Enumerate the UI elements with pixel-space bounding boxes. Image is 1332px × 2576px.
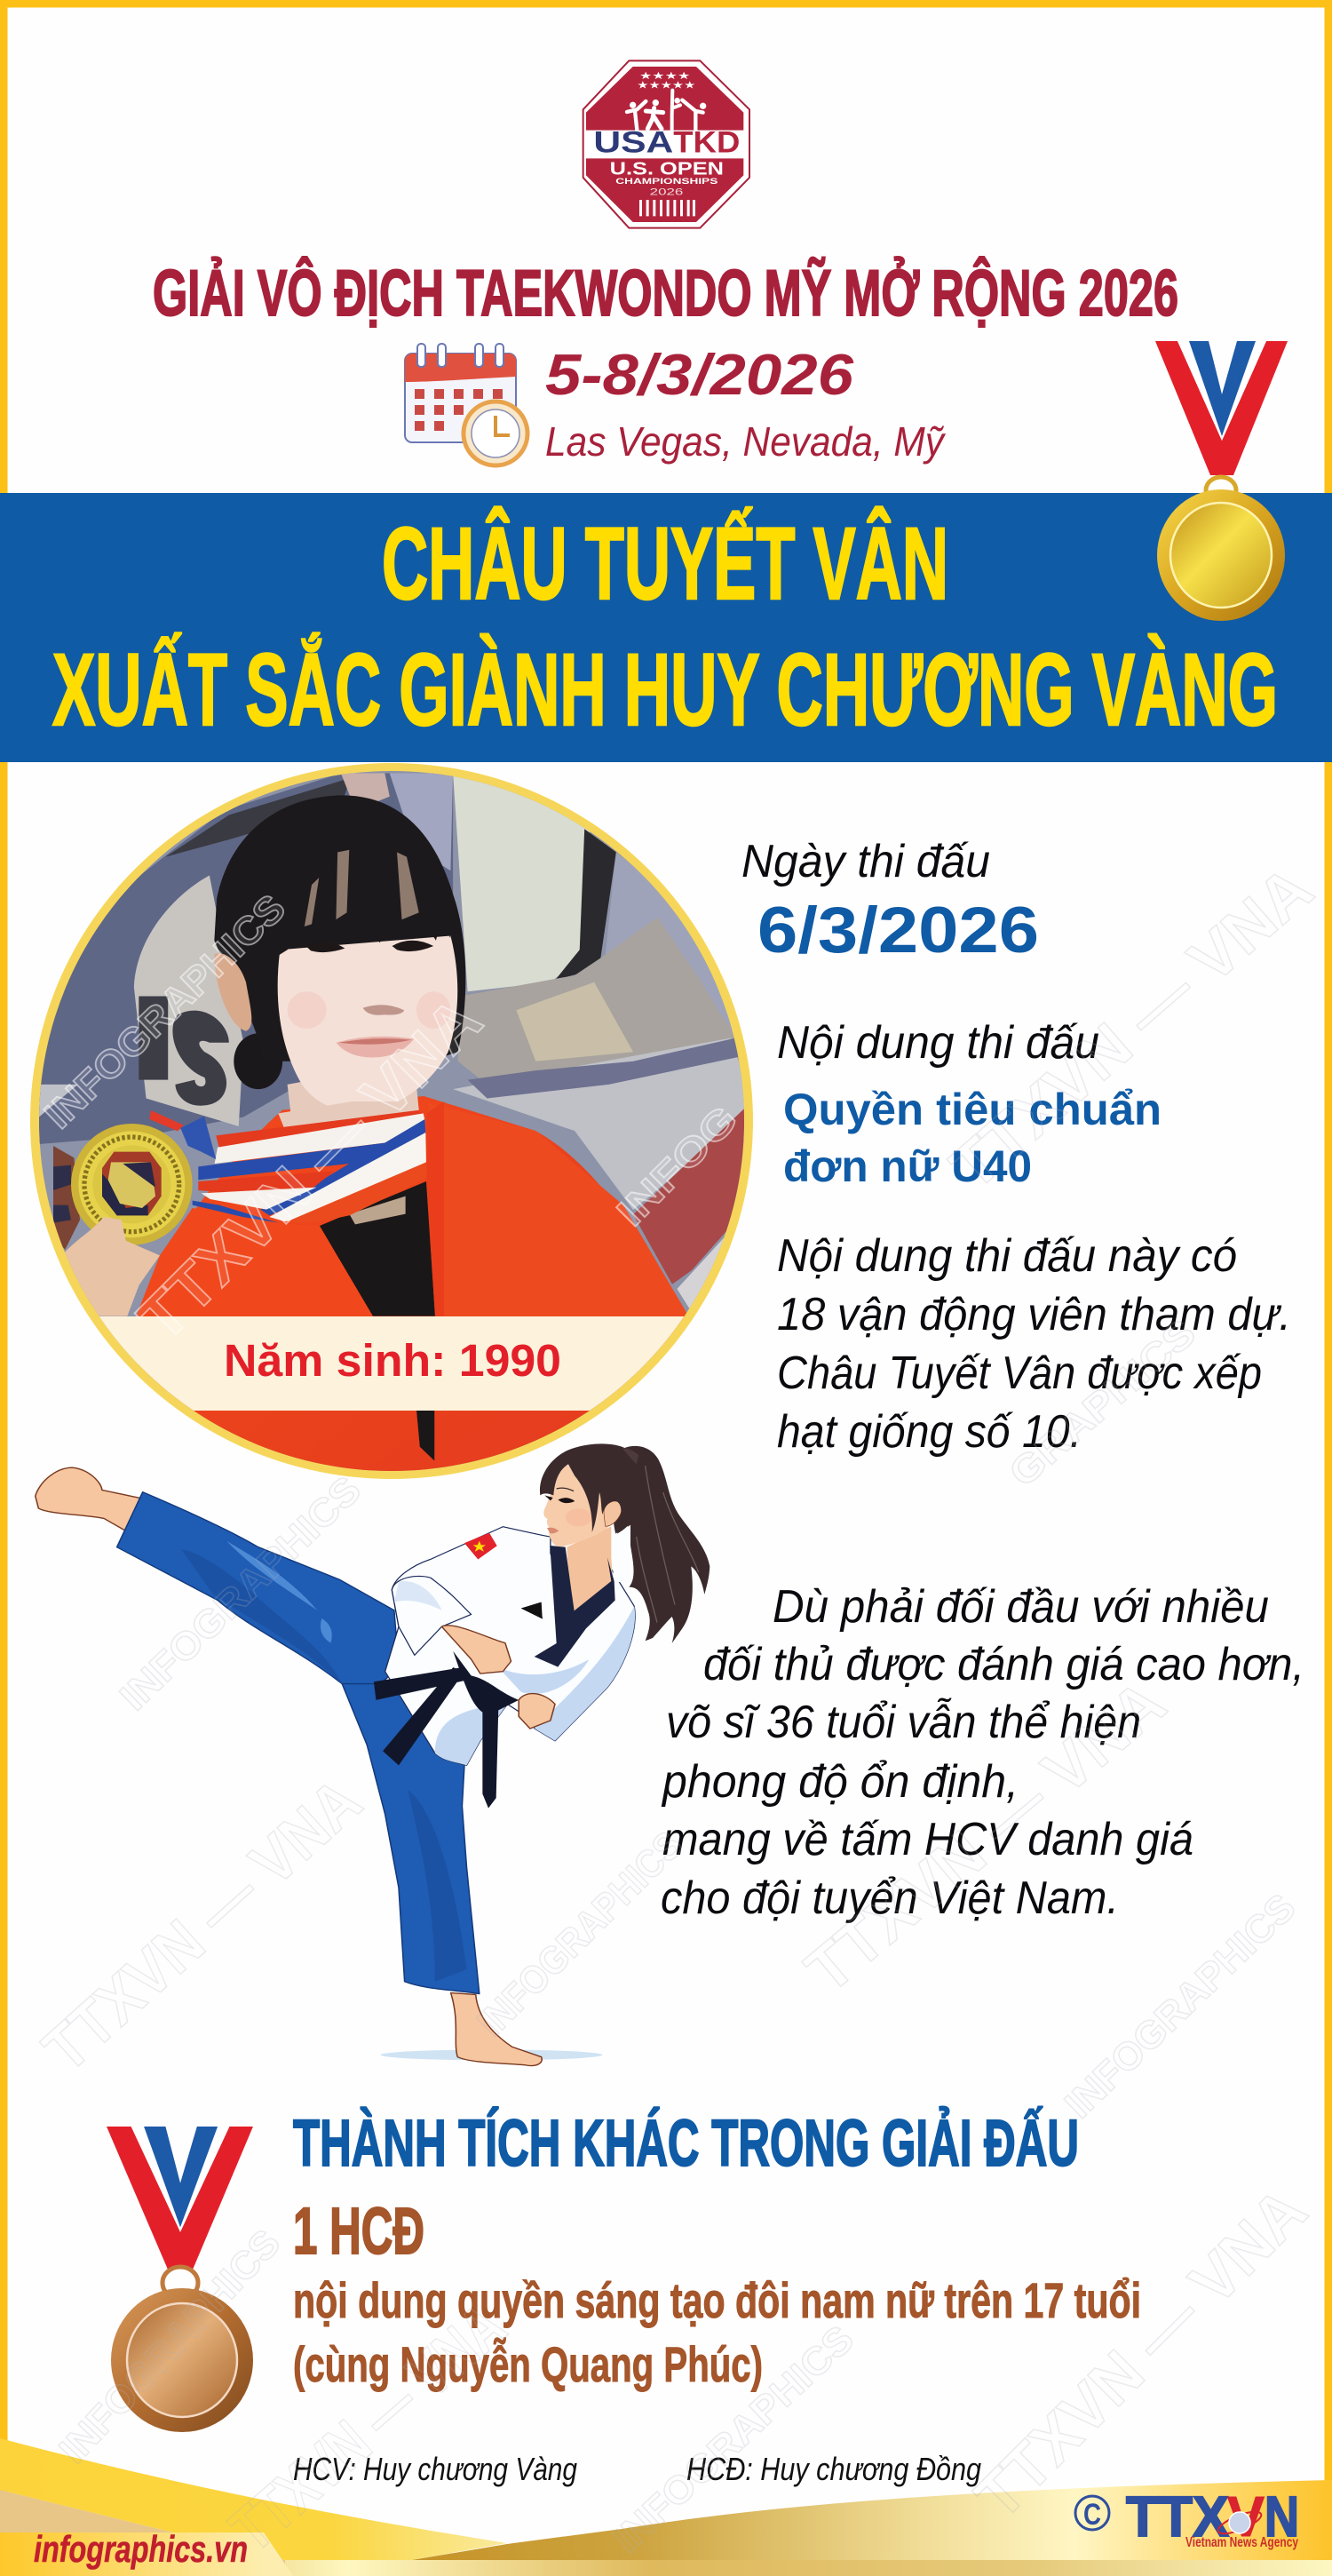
logo: TTXVN Vietnam News Agency: N	[1265, 2485, 1299, 2548]
text: competition event: Nội dung thi đấu	[777, 1017, 1099, 1069]
text: performance summary: võ sĩ 36 tuổi vẫn thể hiện	[666, 1697, 1141, 1748]
event location: Las Vegas, Nevada, Mỹ	[545, 418, 947, 465]
text: performance summary: Dù phải đối đầu với nhiều	[773, 1581, 1269, 1633]
watermark: INFOGRAPHICS	[469, 1823, 691, 2045]
text: performance summary: cho đội tuyển Việt Nam.	[661, 1872, 1119, 1924]
text: competition event	[777, 1017, 1162, 1191]
logo: USATKD U.S. Open: U.S. OPEN	[610, 160, 724, 179]
head and collar of the illustrated athlete	[521, 1443, 640, 1667]
watermark: TTXVN — VNA	[218, 2290, 519, 2565]
text: bronze medal event	[293, 2272, 1141, 2392]
watermark: INFOGRAPHICS	[1057, 1886, 1304, 2127]
text: competition date	[741, 836, 1039, 966]
legend: abbreviations: HCV: Huy chương Vàng	[293, 2451, 577, 2487]
text: performance summary: mang về tấm HCV danh giá	[662, 1814, 1193, 1865]
watermark: TTXVN — VNA	[938, 853, 1326, 1204]
icon: gold medal	[1155, 341, 1288, 621]
logo: USATKD U.S. Open: ★★★★	[639, 69, 690, 82]
logo: TTXVN Vietnam News Agency: TTX	[1126, 2485, 1229, 2548]
text: competition event: đơn nữ U40	[783, 1141, 1032, 1191]
headline: athlete name: CHÂU TUYẾT VÂN	[382, 507, 948, 621]
watermark: INFOGRAPHICS	[51, 2222, 289, 2472]
logo: USATKD U.S. Open: USA	[593, 126, 673, 160]
headline band	[0, 493, 1332, 762]
text: participants and seeding: Châu Tuyết Vân được xếp	[777, 1348, 1262, 1399]
watermark: TTXVN — VNA	[30, 1765, 375, 2086]
logo: USATKD U.S. Open: ★★★★★	[637, 79, 695, 91]
logo: USATKD U.S. Open: 2026	[650, 187, 683, 197]
medal, ribbon and hand in the photo	[53, 1101, 444, 1316]
legend: abbreviations: HCĐ: Huy chương Đồng	[686, 2451, 981, 2487]
illustration: taekwondo kick	[36, 1443, 710, 2065]
watermark: INFOGRAPHICS	[36, 886, 294, 1137]
text: performance summary: đối thủ được đánh giá cao hơn,	[703, 1639, 1304, 1690]
watermark: TTXVN — VNA	[793, 1667, 1178, 2007]
logo: USATKD U.S. Open	[583, 60, 749, 228]
logo: TTXVN Vietnam News Agency	[1075, 2485, 1299, 2550]
watermark: INFOGRAPHICS	[112, 1468, 369, 1719]
text: participants and seeding	[777, 1230, 1291, 1458]
text: competition event: Quyền tiêu chuẩn	[783, 1085, 1162, 1134]
source: infographics.vn: infographics.vn	[34, 2528, 248, 2570]
logo: TTXVN Vietnam News Agency: Vietnam News Agency	[1185, 2535, 1298, 2550]
watermark	[30, 853, 1326, 2565]
text: performance summary: phong độ ổn định,	[661, 1756, 1019, 1808]
logo: TTXVN Vietnam News Agency: V	[1227, 2485, 1265, 2548]
logo: USATKD U.S. Open: CHAMPIONSHIPS	[615, 177, 718, 186]
footer swoosh	[0, 2438, 1332, 2576]
text: participants and seeding: Nội dung thi đấu này có	[777, 1230, 1237, 1282]
watermark: GRAPHICS	[1001, 1311, 1204, 1496]
birth year band	[99, 1316, 684, 1411]
text: bronze medal count: 1 HCĐ	[293, 2194, 424, 2268]
watermark: INFOG	[608, 1097, 746, 1235]
text: competition date: 6/3/2026	[757, 894, 1039, 966]
watermark: TTXVN — VNA	[963, 2174, 1320, 2532]
event date: 5-8/3/2026	[545, 342, 854, 407]
athlete photo circle	[30, 763, 753, 1479]
legend: abbreviations	[293, 2451, 981, 2487]
birth year: Năm sinh: 1990	[224, 1335, 561, 1386]
watermark: TTXVN — VNA	[125, 984, 496, 1355]
icon: calendar with clock	[405, 344, 527, 465]
text: competition date: Ngày thi đấu	[741, 836, 990, 887]
text: performance summary	[661, 1581, 1304, 1924]
text: bronze medal event: (cùng Nguyễn Quang Phúc)	[293, 2336, 763, 2392]
logo: USATKD U.S. Open: TKD	[673, 126, 740, 160]
text: participants and seeding: hạt giống số 10.	[777, 1406, 1082, 1458]
logo: TTXVN Vietnam News Agency: C	[1083, 2498, 1101, 2532]
icon: bronze medal	[107, 2127, 253, 2432]
watermark: INFOGRAPHICS	[605, 2318, 862, 2561]
text: participants and seeding: 18 vận động viên tham dự.	[777, 1289, 1291, 1340]
